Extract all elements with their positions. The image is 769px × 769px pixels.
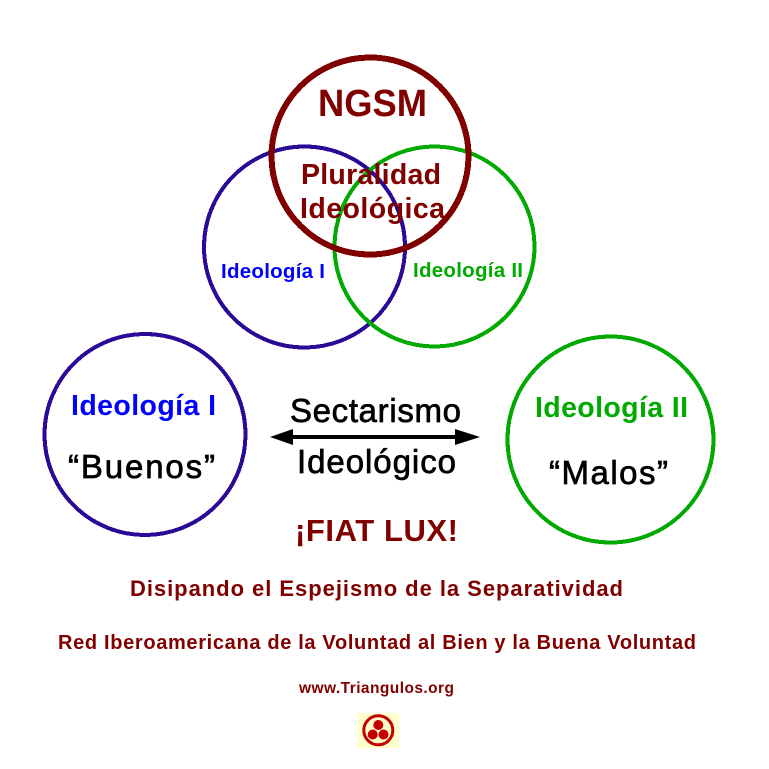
label: Malos: “Malos”: [549, 454, 668, 491]
circle: Ideología II Malos: [508, 336, 714, 542]
heading: FIAT LUX: ¡FIAT LUX!: [295, 513, 458, 548]
text: Red Iberoamericana: Red Iberoamericana de la Voluntad al Bien y la Buena Voluntad: [58, 632, 696, 654]
text: Disipando: Disipando el Espejismo de la Separatividad: [130, 576, 623, 601]
circle: Ideología II (Venn): [334, 146, 534, 346]
arrow: double-headed: [270, 429, 480, 445]
label: Buenos: “Buenos”: [68, 448, 215, 485]
icon: three circles emblem: [357, 713, 399, 748]
heading: NGSM: NGSM: [318, 83, 427, 125]
label: Ideología I small: Ideología I: [221, 260, 325, 283]
text: website: www.Triangulos.org: [298, 680, 454, 697]
label: Ideología II small: Ideología II: [413, 259, 523, 282]
label: Ideología I large: Ideología I: [71, 390, 216, 422]
label: Pluralidad: Pluralidad: [301, 159, 441, 191]
circle: Ideología I (Venn): [204, 146, 405, 348]
circle: Ideología I Buenos: [44, 334, 246, 535]
label: Sectarismo: Sectarismo: [290, 392, 461, 429]
label: Ideológica: Ideológica: [300, 193, 446, 225]
label: Ideológico: Ideológico: [297, 443, 456, 480]
circle: NGSM (Venn): [272, 58, 468, 254]
label: Ideología II large: Ideología II: [535, 392, 688, 424]
